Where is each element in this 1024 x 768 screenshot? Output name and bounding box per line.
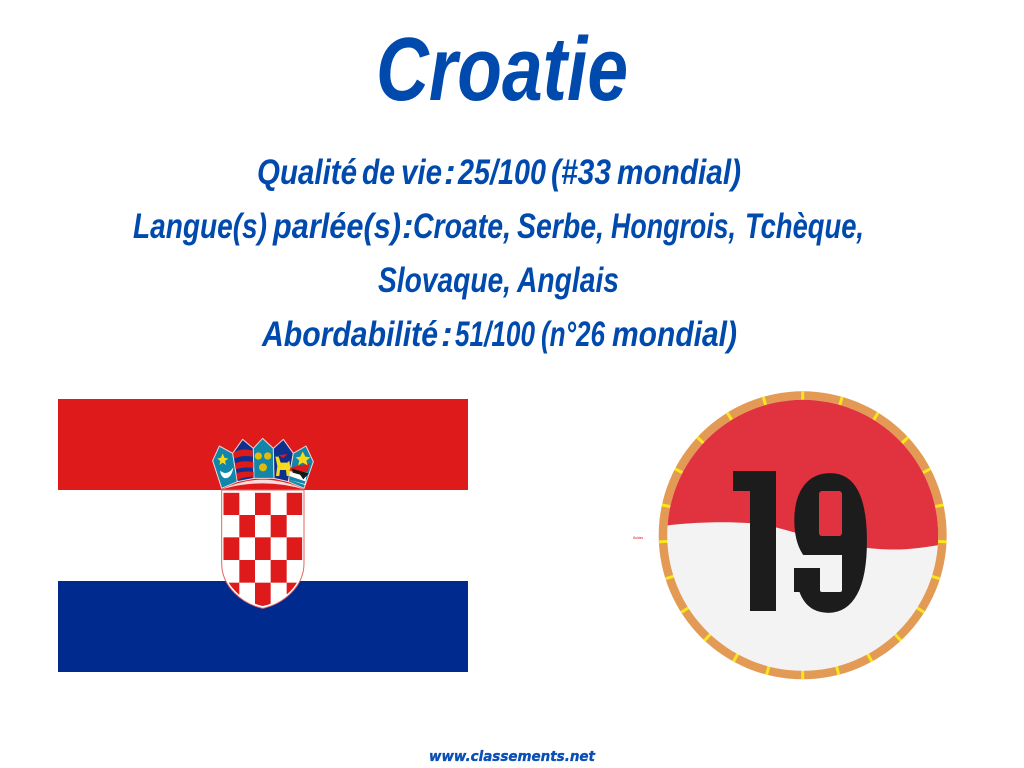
text block: country facts — [133, 153, 864, 354]
quality of life line: vie — [401, 153, 442, 192]
affordability line: : — [441, 315, 453, 354]
quality of life line: (#33 — [551, 153, 611, 192]
star and crescent — [217, 453, 228, 465]
title: Croatie — [376, 20, 628, 120]
ring tick marks — [659, 391, 947, 679]
quality of life line: 25/100 — [457, 153, 546, 192]
languages line 1: Langue(s) — [133, 207, 267, 246]
languages line 2 — [378, 261, 619, 300]
languages line 1: Serbe, — [517, 207, 604, 246]
tiny red label: Guides — [633, 536, 643, 540]
crown base arc — [222, 480, 304, 489]
languages line 1: Tchèque, — [745, 207, 864, 246]
gold stars — [255, 452, 271, 471]
quality of life line — [257, 153, 741, 192]
quality of life line: de — [362, 153, 395, 192]
affordability line: Abordabilité — [261, 315, 438, 354]
quality of life line: : — [444, 153, 456, 192]
outer ring — [659, 391, 947, 679]
checkerboard — [223, 493, 302, 606]
rank number: 1 — [708, 444, 811, 651]
quality of life line: mondial) — [617, 153, 741, 192]
languages line 1: Croate, — [413, 207, 511, 246]
shield outline — [222, 490, 304, 608]
languages line 1 — [133, 207, 864, 246]
goat — [275, 457, 291, 476]
crown of five shields — [213, 438, 313, 488]
rank badge — [659, 391, 947, 680]
languages line 2: Slovaque, — [378, 261, 511, 300]
flag of Croatia — [58, 399, 468, 672]
rank number: 9 — [792, 440, 869, 647]
languages line 1: Hongrois, — [611, 207, 736, 246]
affordability line: 51/100 — [455, 315, 535, 354]
red stripes — [233, 449, 254, 480]
rank number — [733, 471, 867, 613]
disc with wave — [667, 400, 938, 671]
affordability line — [261, 315, 737, 354]
affordability line: (n°26 — [541, 315, 605, 354]
footer website: www.classements.net — [429, 749, 596, 765]
languages line 1: parlée(s) — [272, 207, 401, 246]
languages line 2: Anglais — [516, 261, 619, 300]
coat of arms — [213, 438, 313, 608]
languages line 1: : — [402, 207, 414, 246]
quality of life line: Qualité — [257, 153, 357, 192]
affordability line: mondial) — [612, 315, 737, 354]
stripes with marten — [289, 463, 310, 472]
